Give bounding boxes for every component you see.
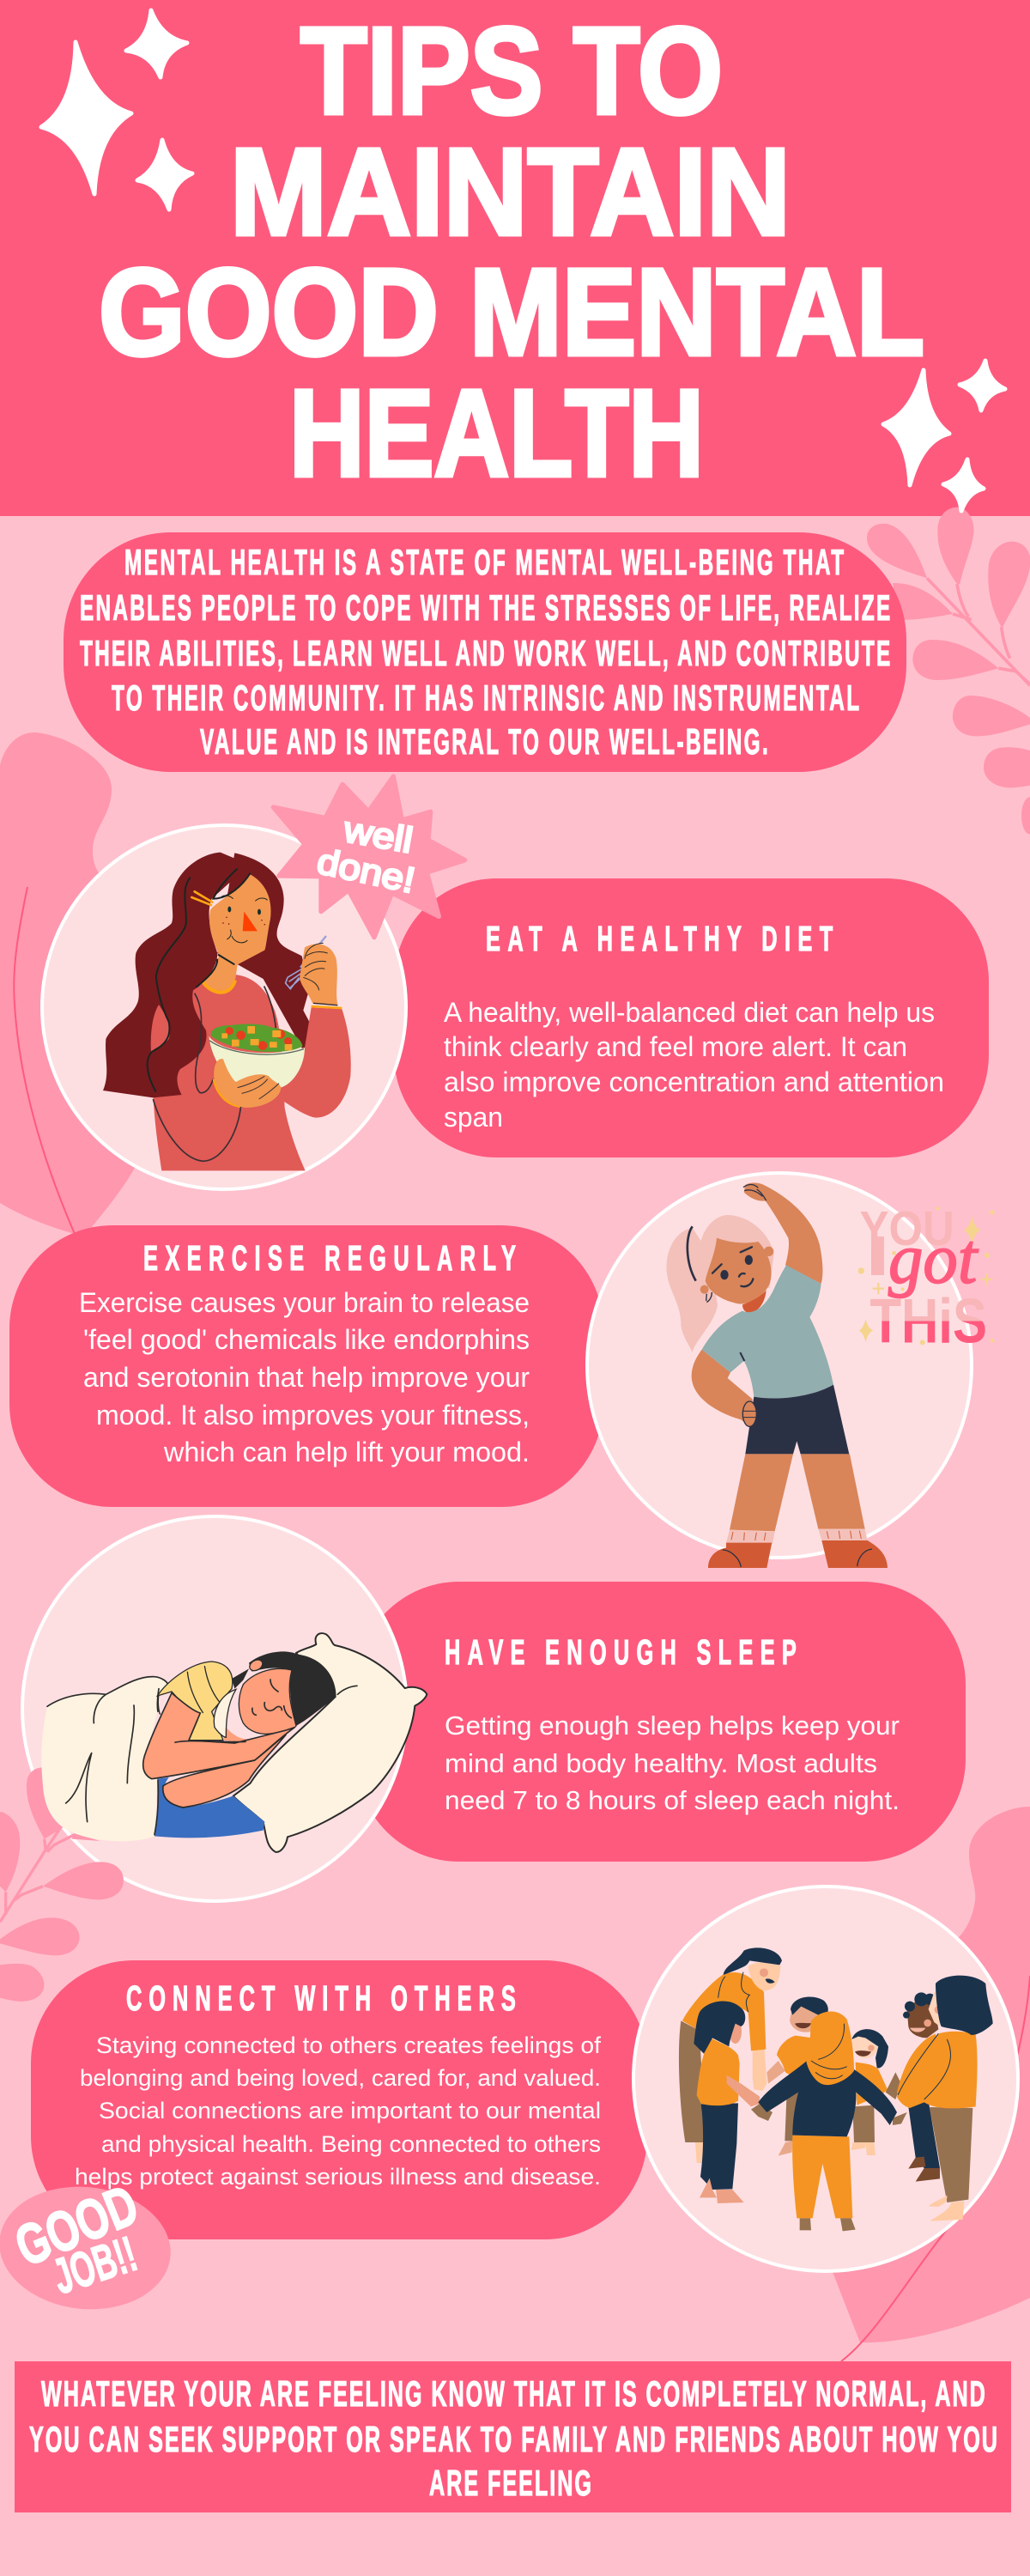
heading: have enough sleep: HAVE ENOUGH SLEEP xyxy=(445,1633,797,1673)
sticker: you got this: YOU xyxy=(860,1202,954,1256)
intro text: THEIR ABILITIES, LEARN WELL AND WORK WELL, AND CONTRIBUTE xyxy=(80,634,890,674)
heading: exercise regularly: EXERCISE REGULARLY xyxy=(143,1239,516,1279)
closing message text: YOU CAN SEEK SUPPORT OR SPEAK TO FAMILY AND FRIENDS ABOUT HOW YOU xyxy=(29,2421,997,2460)
person: right child xyxy=(886,1992,940,2182)
body text: diet: think clearly and feel more alert. It can xyxy=(444,1031,907,1062)
heading: connect with others: CONNECT WITH OTHERS xyxy=(126,1979,516,2019)
body text: exercise: which can help lift your mood. xyxy=(163,1437,530,1467)
body text: diet xyxy=(444,997,944,1133)
body text: diet: A healthy, well-balanced diet can help us xyxy=(444,997,935,1028)
decorative leaf branch: lower left xyxy=(0,1767,124,2002)
body text: exercise: mood. It also improves your fitness, xyxy=(96,1400,530,1431)
person: woman in hijab, back view xyxy=(751,2011,907,2231)
body text: sleep xyxy=(445,1710,900,1815)
body text: sleep: mind and body healthy. Most adults xyxy=(445,1748,877,1778)
body text: sleep: Getting enough sleep helps keep your xyxy=(445,1710,900,1741)
intro text xyxy=(80,543,890,762)
body text: connect: and physical health. Being connected to others xyxy=(101,2131,601,2157)
person: boy xyxy=(766,1997,828,2156)
closing message banner xyxy=(15,2361,1011,2512)
body text: connect: Staying connected to others creates feelings of xyxy=(96,2032,602,2058)
sticker: you got this xyxy=(858,1202,995,1356)
sticker: good job xyxy=(0,2172,177,2318)
panel: have enough sleep xyxy=(0,1516,966,2002)
title: HEALTH xyxy=(289,364,704,502)
title: MAINTAIN xyxy=(230,123,791,261)
illustration: woman eating salad xyxy=(103,853,351,1170)
intro text: TO THEIR COMMUNITY. IT HAS INTRINSIC AND INSTRUMENTAL xyxy=(112,678,859,719)
body text: exercise xyxy=(79,1287,530,1467)
illustration: group of people in a circle xyxy=(679,1947,993,2231)
closing message text: WHATEVER YOUR ARE FEELING KNOW THAT IT IS COMPLETELY NORMAL, AND xyxy=(41,2375,985,2415)
circle: sleep xyxy=(22,1516,407,1901)
person: left girl xyxy=(694,2001,760,2203)
intro text: ENABLES PEOPLE TO COPE WITH THE STRESSES OF LIFE, REALIZE xyxy=(80,588,890,629)
intro panel xyxy=(64,532,906,772)
body text: exercise: Exercise causes your brain to release xyxy=(79,1287,530,1318)
person: tall woman xyxy=(679,1947,782,2163)
title: TIPS TO xyxy=(300,2,723,140)
closing message text: ARE FEELING xyxy=(429,2464,591,2504)
panel: exercise regularly xyxy=(9,1173,995,1568)
sticker: you got this: got xyxy=(888,1219,978,1298)
body text: connect: Social connections are important to our mental xyxy=(99,2098,601,2123)
sticker: you got this: THiS xyxy=(869,1285,987,1356)
sticker: good job: JOB!! xyxy=(46,2226,143,2305)
decorative leaf branch: upper right xyxy=(867,507,1030,835)
icon: sparkles bottom right xyxy=(883,361,1005,511)
person: girl on right xyxy=(851,2029,888,2155)
circle: diet xyxy=(42,825,406,1189)
panel: connect with others xyxy=(31,1886,1018,2271)
body text: diet: span xyxy=(444,1102,503,1133)
body text: sleep: need 7 to 8 hours of sleep each night. xyxy=(445,1785,900,1815)
circle: exercise xyxy=(587,1173,972,1558)
background blob: lower right xyxy=(833,1807,1030,2361)
person: right woman xyxy=(897,1976,993,2221)
title xyxy=(99,2,924,502)
sticker: good job: GOOD xyxy=(7,2172,147,2278)
illustration: person sleeping xyxy=(41,1633,427,1852)
sticker: well done: done! xyxy=(313,841,419,901)
header banner xyxy=(0,0,1030,516)
closing message text xyxy=(29,2375,997,2504)
body text: exercise: 'feel good' chemicals like endorphins xyxy=(83,1324,530,1355)
body text: connect xyxy=(75,2032,602,2190)
illustration: girl stretching xyxy=(667,1182,888,1568)
sticker: well done xyxy=(273,776,465,938)
heading: eat a healthy diet: EAT A HEALTHY DIET xyxy=(486,920,833,959)
intro text: VALUE AND IS INTEGRAL TO OUR WELL-BEING. xyxy=(200,722,768,762)
background blob: upper left xyxy=(0,732,223,1234)
circle: connect xyxy=(633,1886,1018,2271)
icon: sparkles top left xyxy=(41,10,192,210)
body text: diet: also improve concentration and attention xyxy=(444,1066,944,1097)
body text: exercise: and serotonin that help improve your xyxy=(83,1362,530,1393)
title: GOOD MENTAL xyxy=(99,243,924,381)
sticker: well done: well xyxy=(340,809,415,860)
panel: eat a healthy diet xyxy=(42,776,989,1189)
body text: connect: helps protect against serious illness and disease. xyxy=(75,2164,601,2190)
intro text: MENTAL HEALTH IS A STATE OF MENTAL WELL-BEING THAT xyxy=(124,543,844,583)
body text: connect: belonging and being loved, cared for, and valued. xyxy=(80,2065,601,2091)
